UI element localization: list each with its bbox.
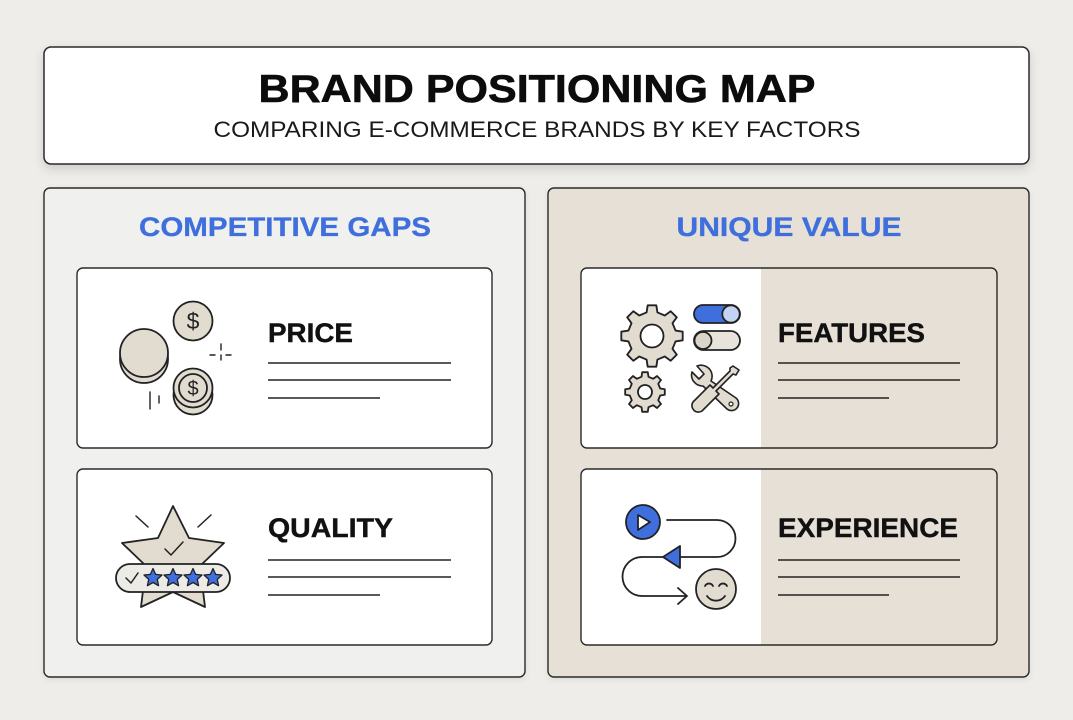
subtitle: COMPARING E-COMMERCE BRANDS BY KEY FACTORS: [214, 117, 860, 142]
icon: customer journey: [622, 505, 736, 609]
text lines: features: [778, 363, 960, 398]
card: price: [77, 268, 492, 448]
heading: price: PRICE: [268, 318, 353, 348]
heading: features: FEATURES: [778, 318, 925, 348]
icon: gears, toggles and tools: [621, 305, 740, 412]
icon: coins: $: [187, 378, 199, 400]
title: BRAND POSITIONING MAP: [258, 68, 816, 111]
card: experience: [581, 469, 997, 645]
heading: experience: EXPERIENCE: [778, 513, 958, 543]
heading: competitive gaps: COMPETITIVE GAPS: [139, 212, 431, 242]
heading: quality: QUALITY: [268, 513, 393, 543]
card: features: [581, 268, 997, 448]
icon: coins: $: [187, 308, 200, 334]
icon: star rating: [116, 506, 230, 607]
card: quality: [77, 469, 492, 645]
header panel: [44, 47, 1029, 164]
panel: competitive gaps: [44, 188, 525, 677]
panel: unique value: [548, 188, 1029, 677]
text lines: experience: [778, 560, 960, 595]
heading: unique value: UNIQUE VALUE: [676, 212, 902, 242]
text lines: quality: [268, 560, 451, 595]
text lines: price: [268, 363, 451, 398]
icon: coins: [120, 302, 231, 414]
